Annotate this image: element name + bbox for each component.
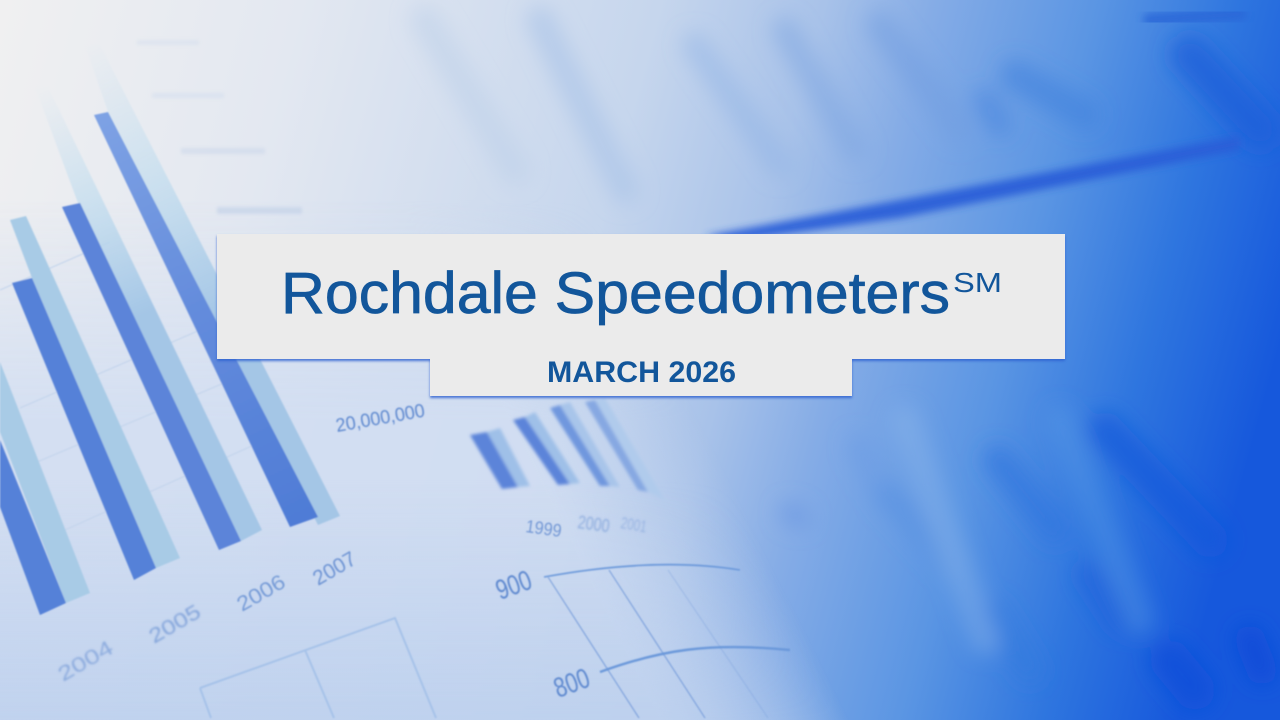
blurred dark streak (705, 136, 1240, 242)
bar pair 2007 (85, 45, 340, 527)
faint blurred text rows (137, 40, 302, 214)
chart axis labels: 2004 (54, 636, 118, 686)
blurred table columns, upper area (425, 20, 1260, 190)
chart axis labels: 800 (549, 662, 594, 704)
small bar chart behind the panel (470, 398, 665, 500)
bar chart: tilted bars on the left (0, 45, 340, 615)
service mark: SM (953, 267, 1002, 298)
chart axis labels: 900 (491, 564, 536, 606)
line chart curves (544, 565, 790, 672)
blurred table columns, right area (790, 420, 1262, 690)
chart axis labels: 2007 (309, 547, 360, 590)
bar pair 2004 (0, 362, 90, 615)
chart axis labels: 2000 (576, 512, 611, 536)
date subtitle: MARCH 2026 (547, 356, 736, 389)
lower paper tint (0, 570, 689, 720)
foreground paper (0, 272, 830, 720)
title: Rochdale Speedometers (281, 261, 950, 326)
panel background (217, 234, 1065, 396)
chart axis labels: 1999 (524, 516, 563, 541)
chart axis labels: 2005 (145, 600, 205, 648)
title panel (217, 234, 1065, 396)
bar pair 2005 (10, 216, 180, 580)
chart axis labels: 2001 (619, 513, 648, 536)
bar pair 2006 (35, 87, 262, 550)
chart axis labels: 20,000,000 (334, 401, 427, 437)
chart axis labels (54, 401, 648, 704)
line chart grid (548, 570, 768, 718)
chart axis labels: 2006 (233, 570, 290, 616)
table outline (200, 618, 436, 718)
blurred dark patch, top right (1150, 14, 1240, 20)
lower table and line chart on the paper (200, 565, 790, 718)
grid lines (0, 242, 265, 530)
